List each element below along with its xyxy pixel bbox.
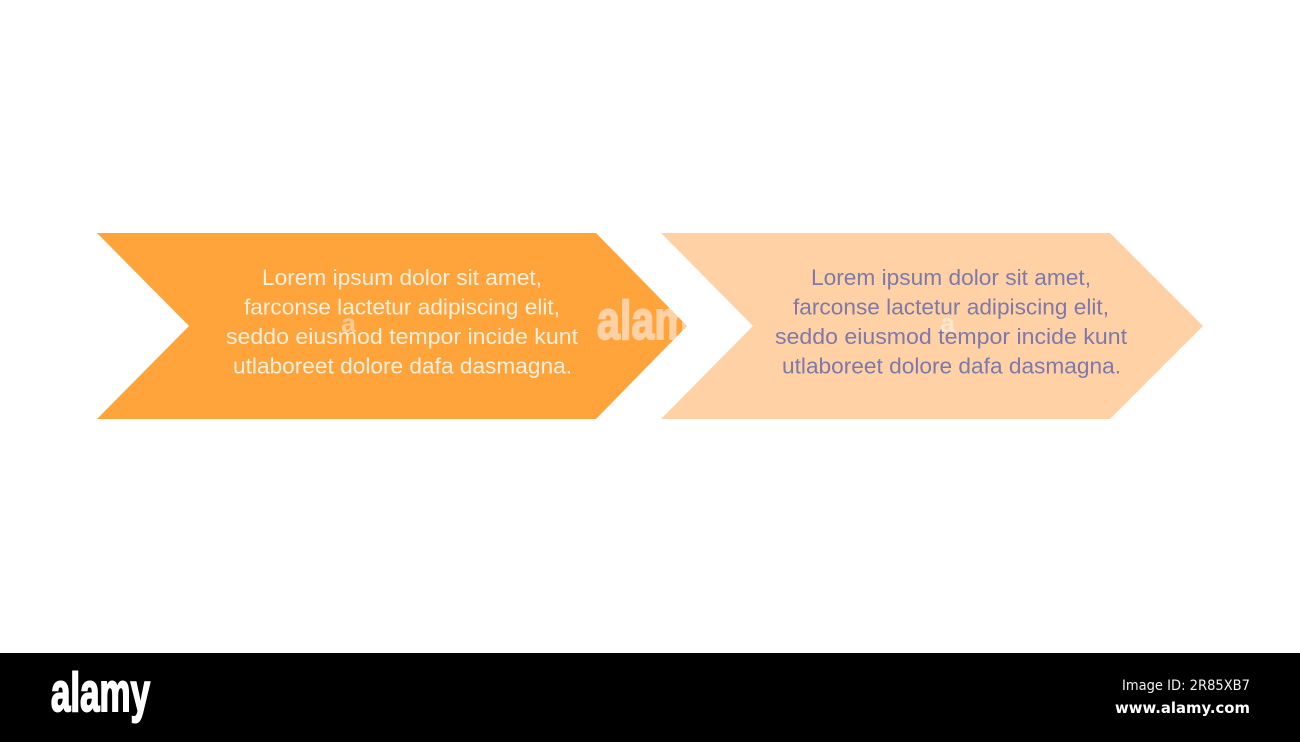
text block: step 1 body: farconse lactetur adipiscing elit, xyxy=(244,294,560,320)
website url: www.alamy.com xyxy=(1115,699,1250,717)
text block: step 2 body: farconse lactetur adipiscing elit, xyxy=(793,294,1109,320)
text block: step 1 body xyxy=(226,265,578,378)
infographic canvas xyxy=(0,233,1300,742)
text block: step 1 body: Lorem ipsum dolor sit amet, xyxy=(262,265,542,290)
arrow shape: peach chevron xyxy=(661,233,1203,419)
panel: step 1 arrow xyxy=(97,233,691,419)
image id: Image ID: 2R85XB7 xyxy=(1122,678,1250,694)
text block: step 2 body: utlaboreet dolore dafa dasmagna. xyxy=(782,354,1121,378)
watermark: small letter on step 1: a xyxy=(341,308,357,338)
footer bar xyxy=(0,653,1300,742)
panel: step 2 arrow xyxy=(661,233,1203,419)
watermark: alamy on arrow tip: alam xyxy=(597,289,691,351)
text block: step 1 body: seddo eiusmod tempor incide kunt xyxy=(226,324,578,349)
text block: step 2 body: Lorem ipsum dolor sit amet, xyxy=(811,265,1091,290)
logo: alamy: alamy xyxy=(51,661,150,723)
watermark: small letter on step 2: a xyxy=(940,308,956,338)
arrow shape: orange chevron xyxy=(97,233,687,419)
text block: step 2 body xyxy=(775,265,1127,378)
text block: step 2 body: seddo eiusmod tempor incide kunt xyxy=(775,324,1127,349)
text block: step 1 body: utlaboreet dolore dafa dasmagna. xyxy=(233,354,572,378)
